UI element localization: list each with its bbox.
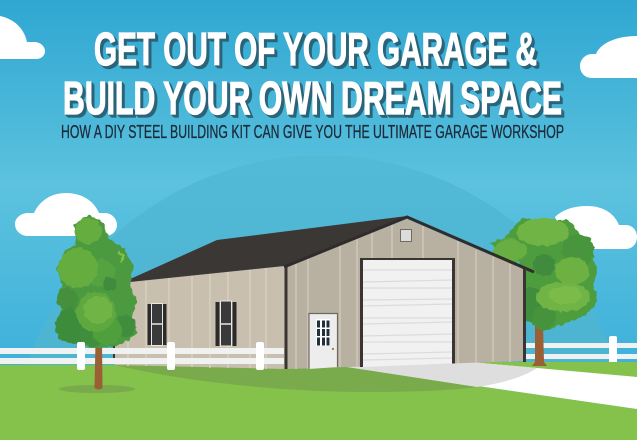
roof	[128, 216, 407, 282]
side wall ribs	[128, 268, 266, 369]
grass: foreground	[0, 365, 637, 440]
background hill	[7, 155, 637, 440]
cloud: mid left	[15, 193, 117, 236]
tree shadow	[59, 385, 135, 393]
grass: back right	[460, 362, 637, 380]
fence post	[77, 342, 85, 370]
front wall	[287, 219, 525, 369]
window 1	[148, 304, 166, 346]
cloud: top left	[0, 16, 45, 59]
driveway	[347, 362, 637, 409]
front wall ribs	[296, 224, 510, 369]
tree: right	[490, 218, 598, 366]
canopy	[490, 218, 598, 330]
cloud: mid right	[555, 206, 637, 249]
trunk	[532, 325, 547, 366]
title	[63, 23, 562, 124]
right fence	[520, 336, 637, 365]
door window	[316, 319, 330, 346]
building shadow on grass	[115, 365, 477, 392]
corner post	[113, 335, 115, 359]
building shadow on driveway	[347, 362, 537, 387]
trunk	[94, 343, 102, 390]
canopy	[55, 215, 137, 348]
right trim	[523, 269, 526, 362]
side wall	[115, 266, 285, 369]
left fence	[0, 342, 284, 370]
door knob	[332, 348, 334, 350]
gable vent	[400, 230, 412, 242]
garage door	[360, 258, 455, 367]
door ribs	[363, 270, 452, 360]
building	[113, 216, 534, 369]
gable trim	[284, 217, 534, 272]
window 2	[216, 301, 236, 346]
tree: left	[55, 215, 137, 390]
cloud: top right	[580, 36, 637, 78]
door panel	[363, 260, 452, 367]
corner trim	[284, 265, 288, 369]
entry door	[309, 314, 338, 369]
door frame	[360, 258, 455, 367]
